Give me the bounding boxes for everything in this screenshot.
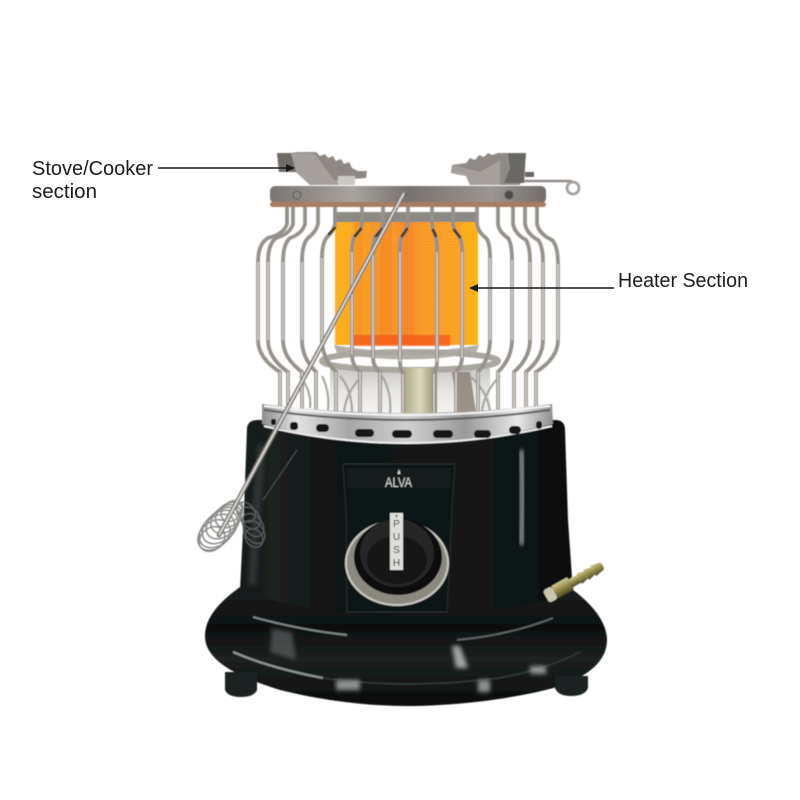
- flared base: [205, 587, 607, 706]
- left pot support: [277, 152, 367, 185]
- cage wire highlights: [258, 252, 558, 414]
- knob with PUSH strip: H: [393, 558, 400, 569]
- heater glowing cylinder: [334, 212, 479, 360]
- knob with PUSH strip: P: [393, 519, 400, 530]
- gas inlet nozzle: [543, 559, 606, 603]
- black heater body: [240, 420, 573, 625]
- wire handle with spiral grip: [192, 193, 404, 557]
- control panel: [343, 464, 455, 612]
- label: Heater Section: Heater Section: [618, 270, 748, 292]
- logo: ALVA: ALVA: [385, 474, 413, 490]
- knob with PUSH strip: [345, 513, 449, 606]
- heater product illustration: [192, 152, 607, 706]
- feet: [225, 672, 588, 697]
- dark wire kinks over the cylinder: [329, 228, 460, 237]
- coil shadow on body: [233, 498, 269, 551]
- cage wires: [258, 207, 558, 420]
- arrow: to heater section: [469, 284, 614, 292]
- label: Stove/Cooker section: Stove/Cooker: [32, 158, 153, 180]
- right pot support and hook: [451, 153, 579, 194]
- lower inner burner section: [300, 352, 500, 416]
- knob with PUSH strip: S: [393, 545, 400, 556]
- label: Stove/Cooker section: section: [32, 181, 97, 203]
- label: Stove/Cooker section: [32, 158, 153, 203]
- knob with PUSH strip: U: [393, 532, 400, 543]
- arrow: to stove section: [158, 164, 295, 172]
- stove ring with copper edge: [270, 186, 546, 207]
- chrome burner collar with vent slots: [262, 404, 553, 443]
